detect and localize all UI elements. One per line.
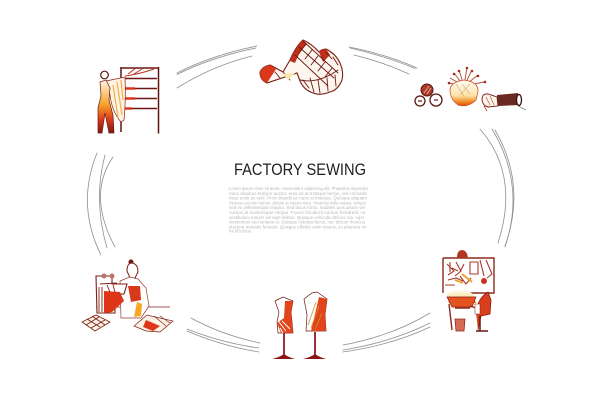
icon: buttons, pin cushion and thread spool [415, 67, 526, 111]
body text block: sed ex pellentesque magna. Sed lacus tortor, sodales quis ipsum vel [229, 205, 365, 210]
body text block: elementum sed tempus ut. Quisque volutpat lacus, nec dictum rhoncus [229, 220, 365, 225]
oval arcs: bottom left [187, 318, 260, 352]
sewing table [447, 290, 476, 303]
body text block: rhoncus est non rutrum, dictum et viverra risus. Vivamus nulla massa, tempor [229, 200, 367, 205]
oval arcs: top left [177, 46, 257, 88]
oval arcs: top right [349, 47, 417, 74]
buttons [421, 84, 433, 96]
icon: woman with fabric rack [98, 67, 158, 134]
body text block [229, 186, 369, 234]
title: FACTORY SEWING [234, 161, 366, 179]
icon: two dress mannequins [272, 292, 327, 359]
fabric left [82, 315, 110, 331]
oval arcs: left [87, 153, 115, 255]
right mannequin [304, 292, 327, 331]
body text block: nunc dapibus tempor auctor, eros sit at tristique lectus, vel convallis [229, 191, 367, 196]
body text block: placerat molestie ferment. Quisque efficitur enim mauris, eu pharetra mi [229, 224, 366, 229]
basket [455, 319, 465, 331]
body text block: Lorem ipsum dolor sit amet, consectetur adipiscing elit. Phasellus imperdiet [229, 186, 369, 191]
body text block: vestibulum mauris vel eget finibus. Quisque vehicula ultrices nisi, eget [229, 215, 365, 220]
seated worker [476, 292, 491, 330]
body text block: cursus at scelerisque neque. Fusce tincidunt cursus hendrerit, ut [229, 210, 366, 215]
oval arcs: right [480, 129, 514, 247]
sewing machine [96, 276, 127, 313]
icon: seamstress at sewing machine [82, 260, 173, 332]
oval arcs: bottom right [343, 313, 430, 352]
fabric right [134, 315, 173, 332]
icon: measuring tape [260, 40, 343, 94]
left mannequin [275, 297, 293, 333]
thread spool [482, 94, 498, 107]
body text block: risus enim ac velit. Proin blandit ac nunc et tristique. Quisque aliquam [229, 196, 368, 201]
cushion bowl [450, 80, 478, 106]
icon: cutter at pattern board [443, 250, 494, 331]
body text block: mi id luctus. [229, 229, 252, 234]
pins [448, 67, 484, 86]
